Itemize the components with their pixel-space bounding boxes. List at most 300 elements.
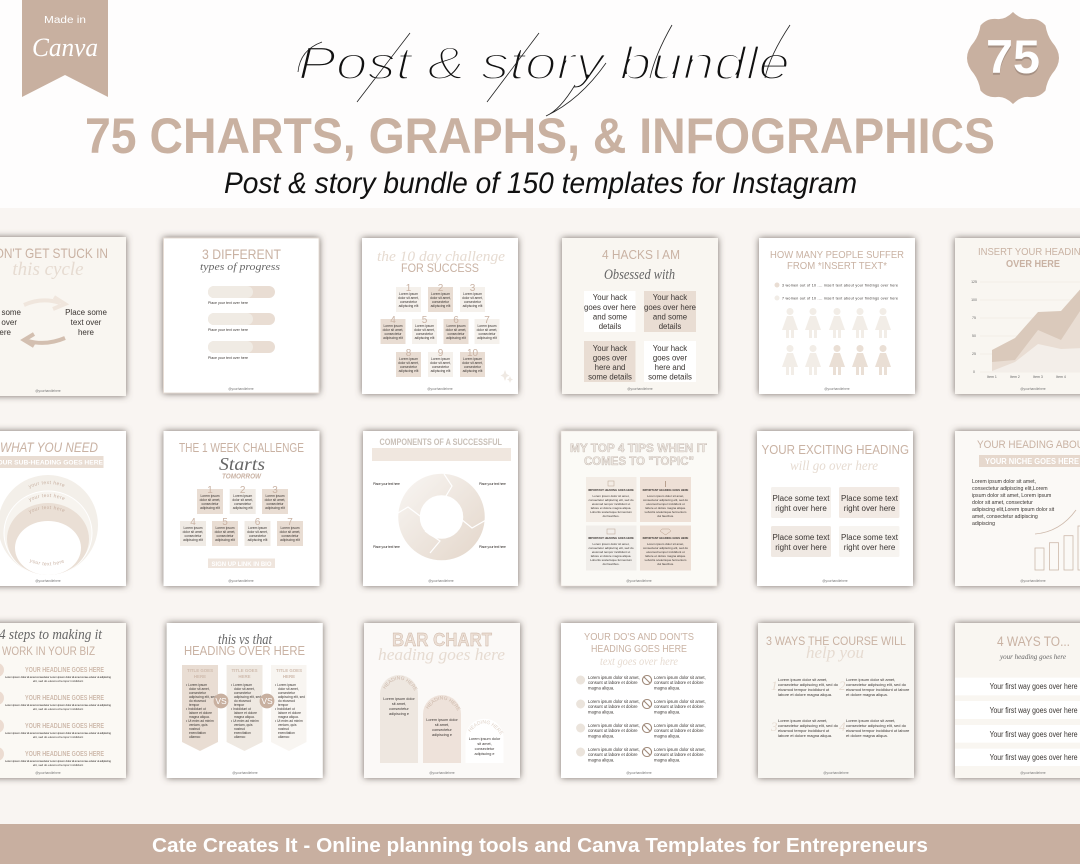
column C: exercitation (278, 731, 295, 735)
box 3: right over here (775, 543, 827, 552)
step 1: dolor sit amet, (200, 498, 220, 502)
script: types of progress (200, 262, 280, 273)
box 1: Place some text (773, 494, 830, 503)
panel: components donut (363, 431, 518, 586)
hack box 4 (644, 341, 696, 382)
step 1: Lorem ipsum (399, 292, 418, 296)
tip 1: consectetur adipiscing elit, sed do (778, 682, 839, 687)
step 3 (460, 283, 485, 312)
tip 2: Lorem ipsum dolor sit amet, (846, 677, 895, 682)
step 2: Lorem ipsum (431, 292, 450, 296)
badge: 75: 75 (986, 30, 1040, 83)
column A: • Ut enim ad minim (186, 719, 214, 723)
tip 2 (839, 677, 910, 697)
column A: labore et dolore (189, 711, 212, 715)
hack box 3: some details (588, 372, 632, 382)
column B: do eiusmod (234, 699, 251, 703)
tip 1: labore et dolore magna aliqua. (591, 506, 631, 510)
step 4: adipiscing elit (383, 336, 403, 340)
step 7 (474, 315, 500, 344)
heading: 3 WAYS THE COURSE WILL (766, 634, 906, 648)
area chart: Item 4 (1056, 375, 1066, 379)
left list: consunt ut labore et dolore (588, 752, 638, 757)
strip 1 (955, 678, 1080, 695)
step 1: consectetur (400, 300, 418, 304)
column A: adipiscing elit, sed (189, 695, 216, 699)
step 3: adipiscing elit (463, 304, 482, 308)
panel: do's and don'ts (561, 623, 717, 778)
panel: don't get stuck (0, 237, 126, 396)
box 3: Place some text (773, 533, 830, 542)
step 4: 4 (190, 517, 196, 528)
box 4: right over here (844, 543, 896, 552)
nested arcs chart: your text here (28, 506, 64, 514)
tip 4: dui faucibus. (657, 562, 674, 566)
heading: HOW MANY PEOPLE SUFFER (770, 249, 904, 261)
step 1 (396, 283, 421, 312)
step 9: consectetur (432, 365, 450, 369)
step 2: Lorem ipsum (233, 494, 252, 498)
row 3: elit, sed do eiusmod tempor incididunt (33, 735, 83, 739)
legend dot 1 (774, 282, 780, 288)
step 3 (262, 485, 288, 514)
tip 3: labore et dolore magna aliqua. (591, 554, 631, 558)
step 4: consectetur (384, 332, 402, 336)
hack box 4: goes over (653, 354, 688, 362)
step 9: dolor sit amet, (430, 361, 451, 365)
step 2: dolor sit amet, (430, 296, 451, 300)
step 5: consectetur (416, 332, 434, 336)
arch bar 2 (423, 695, 461, 763)
column A: do eiusmod (189, 699, 206, 703)
step 5: adipiscing elit (415, 336, 434, 340)
nested arcs chart: your text here (29, 559, 64, 566)
step 6: dolor sit amet, (247, 530, 268, 534)
column A: • Lorem ipsum (186, 683, 207, 687)
left list: magna aliqua. (588, 686, 614, 690)
step 5: consectetur (216, 534, 234, 538)
cards band background (0, 208, 1080, 824)
tip 2: Lobortis scelerisque fermentum (645, 510, 687, 514)
panel: niche growth (955, 431, 1080, 586)
area chart: Item 3 (1033, 375, 1043, 379)
label 1: Place your text over here (208, 301, 248, 305)
VS badge 1: VS (215, 696, 227, 706)
step 4: dolor sit amet, (383, 328, 403, 332)
step 3: dolor sit amet, (462, 296, 483, 300)
step 6: consectetur (249, 534, 267, 538)
arch bar 2: sit amet, (435, 723, 449, 727)
box 2: Place some text (841, 494, 899, 503)
handle: @yourhandlehere (1020, 387, 1046, 391)
heading: 4 WAYS TO... (997, 634, 1070, 649)
arch bar 1: consectetur (389, 707, 410, 711)
tip 2: eiusmod tempor incididunt ut (646, 502, 685, 506)
tip 2: eiusmod tempor incididunt ut labore (846, 687, 910, 692)
step 5 (212, 517, 238, 546)
body text: amet, consectetur adipiscing (972, 514, 1038, 520)
right text: here (78, 328, 95, 337)
banner (372, 448, 511, 461)
step 6: Lorem ipsum (248, 526, 267, 530)
nested arcs chart: your text here (28, 480, 64, 489)
step 10: 10 (467, 348, 478, 359)
heading: 4 HACKS I AM (602, 247, 680, 262)
tip 1: labore et dolore magna aliqua. (778, 692, 832, 697)
tip 3: eiusmod tempor incididunt ut (592, 550, 630, 554)
hack box 4: here and (655, 363, 685, 372)
handle: @yourhandlehere (824, 387, 850, 391)
step 1: adipiscing elit (200, 506, 220, 510)
step 10: consectetur (464, 365, 482, 369)
panel: 4 hacks (562, 238, 718, 394)
step 8: dolor sit amet, (398, 361, 419, 365)
tip 2 (640, 477, 691, 522)
column B (227, 665, 262, 751)
step 6: 6 (255, 517, 261, 528)
script: the 10 day challenge (377, 249, 505, 265)
handle: @yourhandlehere (822, 579, 848, 583)
step 2: dolor sit amet, (232, 498, 253, 502)
step 5: 5 (222, 517, 228, 528)
handle: @yourhandlehere (35, 579, 61, 583)
handle: @yourhandlehere (35, 771, 61, 775)
step 6: 6 (453, 315, 459, 326)
step 1: 1 (207, 485, 213, 496)
step 1: consectetur (201, 502, 219, 506)
body text: Lorem ipsum dolor sit amet, (972, 479, 1036, 485)
tip 4: consectetur adipiscing elit, sed do (846, 723, 907, 728)
arch bar 1: adipiscing e (389, 712, 409, 716)
handle: @yourhandlehere (232, 771, 258, 775)
step 2: adipiscing elit (431, 304, 450, 308)
area chart: Item 1 (987, 375, 997, 379)
tip 1 (586, 477, 636, 522)
script title: Post & story bundle (298, 37, 790, 89)
step 9: 9 (438, 348, 444, 359)
column C: do eiusmod (278, 699, 295, 703)
subheading: Post & story bundle of 150 templates for Instagram (224, 167, 857, 200)
step 2 (230, 485, 256, 514)
area chart: Item 2 (1010, 375, 1020, 379)
area chart: 75 (972, 316, 976, 320)
step 8: consectetur (400, 365, 418, 369)
badge: Made in Canva ribbon: Canva (32, 33, 98, 62)
right text: text over (71, 318, 102, 327)
tip 1: IMPORTANT HEADING GOES HERE (588, 488, 634, 492)
step 6: Lorem ipsum (446, 324, 466, 328)
tip 1: Lobortis scelerisque fermentum (590, 510, 632, 514)
step 8: 8 (406, 348, 412, 359)
arrow top (24, 297, 65, 309)
right list: Lorem ipsum dolor sit amet, (654, 723, 706, 728)
tip 4: IMPORTANT HEADING GOES HERE (643, 536, 689, 540)
arch bar 2: HEADING HERE (426, 696, 460, 711)
tip 1: 1 (771, 678, 778, 693)
panel: bar chart arches (359, 618, 525, 783)
step 1: dolor sit amet, (398, 296, 419, 300)
row 2: YOUR HEADLINE GOES HERE (25, 695, 104, 702)
right list: consunt ut labore et dolore (654, 680, 704, 685)
body text: dolor sit amet, consectetur (972, 500, 1033, 506)
area chart: 50 (972, 334, 976, 338)
step 2 (428, 283, 453, 312)
script title (298, 25, 790, 116)
tip 2: consectetur adipiscing elit, sed do (643, 498, 688, 502)
column A: tempor (189, 703, 200, 707)
column A: exercitation (189, 731, 206, 735)
step 4: dolor sit amet, (183, 530, 203, 534)
step 2: consectetur (234, 502, 252, 506)
step 7: Lorem ipsum (280, 526, 300, 530)
hack box 2: Your hack (653, 293, 687, 302)
box 2: right over here (844, 504, 896, 513)
label 3: Place your text over here (208, 356, 248, 360)
arch bar 2: Lorem ipsum dolor (426, 718, 458, 722)
script: 4 steps to making it (0, 627, 103, 643)
column C (271, 665, 306, 751)
step 6: dolor sit amet, (446, 328, 466, 332)
donut cycle chart (398, 474, 486, 553)
left list: magna aliqua. (588, 710, 614, 714)
handle: @yourhandlehere (428, 579, 454, 583)
step 7: consectetur (478, 332, 496, 336)
tip 1: Lorem ipsum dolor sit amet, (778, 677, 827, 682)
tip 2: labore et dolore magna aliqua. (645, 506, 686, 510)
step 7: consectetur (281, 534, 299, 538)
row 4 (0, 747, 111, 767)
column B: veniam, quis (234, 723, 253, 727)
heading: THE 1 WEEK CHALLENGE (179, 440, 304, 455)
heading: BAR CHART (392, 630, 492, 650)
step 7: Lorem ipsum (477, 324, 497, 328)
handle: @yourhandlehere (427, 387, 453, 391)
column C: dolor sit amet, (278, 687, 299, 691)
area chart: 25 (972, 352, 976, 356)
step 5 (412, 315, 437, 344)
VS badge 2: VS (261, 696, 273, 706)
script: this cycle (12, 259, 84, 280)
step 4 (180, 517, 206, 546)
step 8 (396, 348, 421, 377)
step 4: Lorem ipsum (183, 526, 203, 530)
column B: labore et dolore (234, 711, 257, 715)
progress bar 2 (208, 313, 275, 325)
tip 3: Lorem ipsum dolor sit amet, (592, 542, 630, 546)
column A: TITLE GOES (187, 668, 213, 673)
panel: 4 steps (0, 623, 126, 778)
heading: OVER HERE (1006, 258, 1060, 270)
right list: Lorem ipsum dolor sit amet, (654, 699, 706, 704)
legend text 1: 3 women out of 10 .... insert text about your findings over here (782, 284, 898, 288)
subheading: TOMORROW (222, 472, 262, 480)
step 6: adipiscing elit (446, 336, 466, 340)
handle: @yourhandlehere (228, 579, 254, 583)
hack box 2: and some (653, 312, 687, 322)
column A: nostrud (189, 727, 200, 731)
progress bar 3 (208, 341, 275, 353)
row 1: Lorem ipsum dolor sit amet consectetur Lorem ipsum dolor sit amet conse ectetur ut adipiscing (5, 675, 111, 679)
hack box 3: goes over (593, 354, 628, 362)
step 2: 2 (240, 485, 246, 496)
row 2 (0, 691, 111, 711)
label 2: Place your text over here (208, 328, 248, 332)
panel: what you need (0, 426, 131, 591)
step 5: Lorem ipsum (215, 526, 235, 530)
left list: consunt ut labore et dolore (588, 704, 638, 709)
heading: WHAT YOU NEED (0, 440, 98, 455)
tip 3: Lorem ipsum dolor sit amet, (778, 718, 827, 723)
box 1 (771, 487, 831, 518)
step 5: 5 (422, 315, 428, 326)
tip 2: IMPORTANT HEADING GOES HERE (643, 488, 689, 492)
step 10: adipiscing elit (463, 369, 482, 373)
handle: @yourhandlehere (1020, 771, 1046, 775)
handle: @yourhandlehere (626, 771, 652, 775)
heading: COMPONENTS OF A SUCCESSFUL (380, 437, 502, 447)
column B: TITLE GOES (231, 668, 258, 673)
column A: magna aliqua. (189, 715, 210, 719)
row 1: elit, sed do eiusmod tempor incididunt (33, 679, 83, 683)
step 8: adipiscing elit (399, 369, 418, 373)
column B: tempor (234, 703, 245, 707)
panel: top 4 tips (561, 431, 717, 586)
step 4: 4 (390, 315, 396, 326)
tip 1 (771, 677, 839, 697)
hack box 1: goes over here (584, 303, 636, 312)
tip 3: IMPORTANT HEADING GOES HERE (588, 536, 634, 540)
column C: magna aliqua. (278, 715, 299, 719)
VS badge 2 (260, 694, 274, 708)
tip 4: labore et dolore magna aliqua. (645, 554, 686, 558)
step 7: 7 (484, 315, 490, 326)
column A (182, 665, 218, 751)
step 3: 3 (272, 485, 278, 496)
step 4: Lorem ipsum (383, 324, 403, 328)
tip 4 (640, 526, 691, 570)
hack box 2: goes over here (644, 303, 696, 312)
strip 4 (955, 749, 1080, 766)
arch bar 1 (380, 675, 418, 763)
tip 4: Lorem ipsum dolor sit amet, (846, 718, 895, 723)
step 9: Lorem ipsum (431, 357, 450, 361)
hack box 3: Your hack (593, 344, 627, 353)
step 3: 3 (470, 283, 476, 294)
left list: Lorem ipsum dolor sit amet, (588, 723, 640, 728)
column C: adipiscing elit, sed (278, 695, 305, 699)
button: SIGN UP LINK IN BIO (212, 561, 272, 568)
badge: 75: 75 (986, 32, 1040, 85)
right list: magna aliqua. (654, 686, 680, 690)
hack box 2: details (659, 322, 681, 331)
step 1 (197, 485, 223, 514)
step 3: adipiscing elit (265, 506, 285, 510)
step 2: 2 (438, 283, 444, 294)
left list: Lorem ipsum dolor sit amet, (588, 699, 640, 704)
column B: magna aliqua. (234, 715, 255, 719)
panel: 3 different (164, 238, 319, 393)
step 3: Lorem ipsum (265, 494, 285, 498)
right list: magna aliqua. (654, 758, 680, 762)
left list: Lorem ipsum dolor sit amet, (588, 747, 640, 752)
panel: area chart (955, 238, 1080, 394)
tip 1: dui faucibus. (603, 514, 620, 518)
step 1: adipiscing elit (399, 304, 418, 308)
step 6 (244, 517, 270, 546)
box 3 (771, 526, 831, 557)
step 9 (428, 348, 453, 377)
column C: consectetur (278, 691, 296, 695)
panel: 10 day challenge (362, 238, 518, 394)
script: will go over here (790, 459, 878, 474)
tip 4 (839, 718, 910, 738)
step 10: Lorem ipsum (463, 357, 482, 361)
script: help you (806, 643, 864, 662)
handle: @yourhandlehere (429, 771, 455, 775)
step 10: dolor sit amet, (462, 361, 483, 365)
heading: COMES TO "TOPIC" (584, 456, 694, 468)
area chart: 0 (973, 370, 975, 374)
heading: FROM *INSERT TEXT* (787, 260, 887, 272)
script: your heading goes here (999, 653, 1066, 661)
step 7: 7 (287, 517, 293, 528)
column C: TITLE GOES (276, 668, 302, 673)
left list: magna aliqua. (588, 758, 614, 762)
step 7 (277, 517, 303, 546)
tip 1: consectetur adipiscing elit, sed do (588, 498, 634, 502)
tip 2: 2 (839, 678, 846, 693)
heading: WORK IN YOUR BIZ (2, 644, 95, 658)
arch bar 2: consectetur (432, 728, 453, 732)
tip 2: et dolore magna aliqua. (846, 692, 888, 697)
column B: consectetur (234, 691, 252, 695)
arch bar 2: adipiscing e (432, 733, 452, 737)
arch bar 3: Lorem ipsum dolor (469, 737, 501, 741)
icon: sparkles (500, 370, 513, 383)
step 1: Lorem ipsum (200, 494, 220, 498)
row 3 (0, 719, 111, 739)
column C: nostrud (278, 727, 289, 731)
row 1 (0, 663, 111, 683)
tip 2: consectetur adipiscing elit, sed do (846, 682, 907, 687)
column C: • Lorem ipsum (275, 683, 296, 687)
tip 3: eiusmod tempor incididunt ut (778, 728, 830, 733)
body text: adipiscing elit,Lorem ipsum dolor sit (972, 507, 1055, 513)
strip 3 (955, 725, 1080, 743)
badge: Made in Canva ribbon: Made in (44, 15, 86, 26)
panel: 3 ways the course (758, 623, 914, 778)
tip 3: consectetur adipiscing elit, sed do (778, 723, 839, 728)
hack box 3 (584, 341, 636, 382)
tip 3: dui faucibus. (603, 562, 620, 566)
hack box 4: some details (648, 372, 692, 382)
arch bar 3: HEADING HERE (468, 720, 504, 735)
template cards grid (0, 232, 1080, 783)
heading: HEADING OVER HERE (184, 644, 305, 658)
script: this vs that (218, 632, 273, 648)
body text: adipiscing (972, 521, 995, 527)
tip 1: eiusmod tempor incididunt ut (592, 502, 630, 506)
hack box 1: Your hack (593, 293, 627, 302)
step 4: adipiscing elit (183, 538, 203, 542)
column B: nostrud (234, 727, 245, 731)
right list: magna aliqua. (654, 734, 680, 738)
pictogram people (782, 308, 891, 375)
step 6 (444, 315, 468, 344)
arch bar 1: Lorem ipsum dolor (383, 697, 415, 701)
arrow bottom (24, 334, 65, 346)
step 6: consectetur (447, 332, 465, 336)
